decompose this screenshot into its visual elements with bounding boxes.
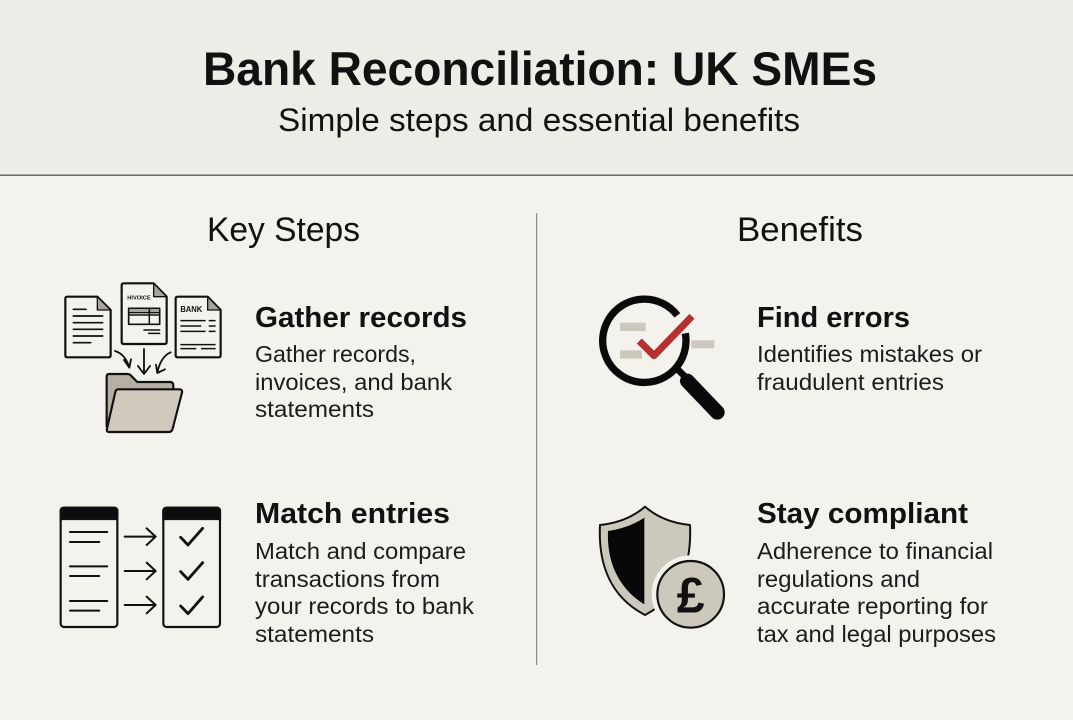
step: Match entries: statements <box>255 621 374 647</box>
icon: matching lists <box>61 508 220 627</box>
benefit: Find errors: Identifies mistakes or <box>757 341 982 367</box>
icon: documents into folder: BANK <box>180 305 203 314</box>
subtitle: Simple steps and essential benefits <box>278 102 800 138</box>
benefit: Find errors <box>757 302 982 395</box>
icon: magnifying glass with check <box>603 299 717 412</box>
header band <box>0 0 1073 176</box>
benefit: Stay compliant: tax and legal purposes <box>757 621 996 647</box>
icon: shield with pound coin: £ <box>677 567 705 623</box>
benefit: Stay compliant: Stay compliant <box>757 498 968 530</box>
heading: Key Steps: Key Steps <box>207 211 360 249</box>
benefit: Find errors: fraudulent entries <box>757 369 944 395</box>
step: Gather records: Gather records <box>255 302 467 334</box>
title: Bank Reconciliation: UK SMEs <box>203 42 877 95</box>
benefit: Find errors: Find errors <box>757 302 910 334</box>
column divider <box>536 213 537 665</box>
step: Match entries <box>255 498 475 647</box>
step: Match entries: Match and compare <box>255 538 466 564</box>
icon: shield with pound coin <box>600 507 730 633</box>
heading: Benefits: Benefits <box>737 211 863 249</box>
benefit: Stay compliant <box>757 498 996 647</box>
step: Gather records: statements <box>255 396 374 422</box>
step: Gather records <box>255 302 467 422</box>
step: Match entries: transactions from <box>255 566 440 592</box>
benefit: Stay compliant: regulations and <box>757 566 920 592</box>
benefit: Stay compliant: accurate reporting for <box>757 593 988 619</box>
step: Match entries: your records to bank <box>255 593 475 619</box>
icon: documents into folder <box>65 283 221 432</box>
step: Gather records: invoices, and bank <box>255 369 453 395</box>
step: Gather records: Gather records, <box>255 341 416 367</box>
icon: documents into folder: HIVOICE <box>127 295 151 301</box>
benefit: Stay compliant: Adherence to financial <box>757 538 993 564</box>
step: Match entries: Match entries <box>255 498 450 530</box>
